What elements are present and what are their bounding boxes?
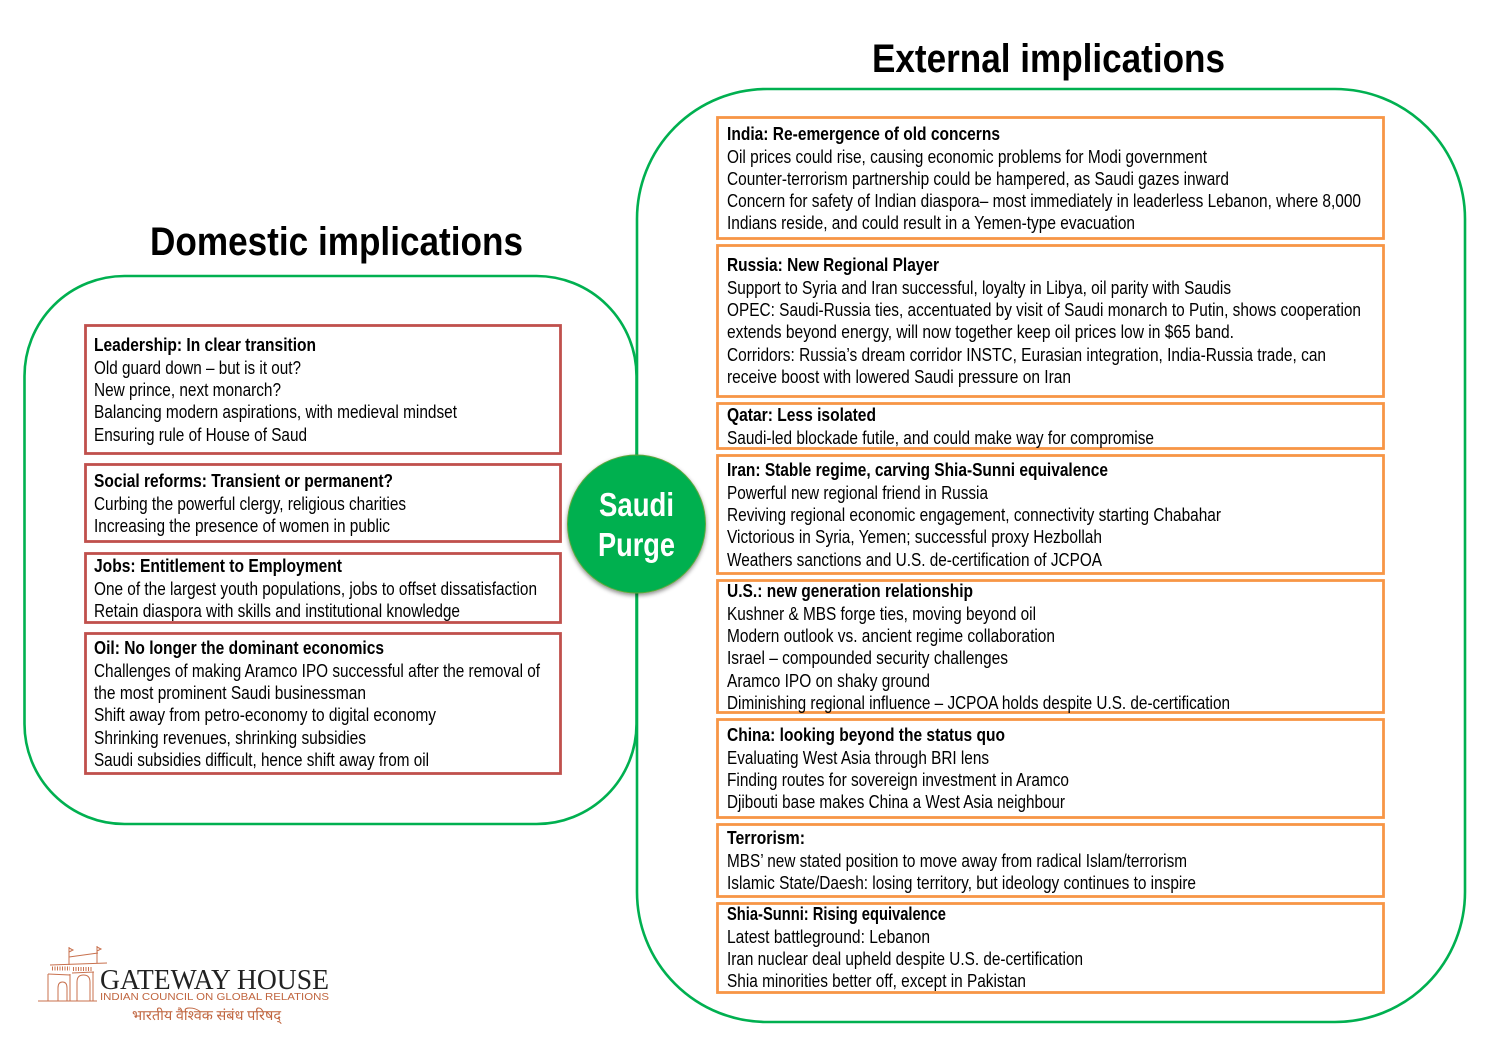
center circle: Saudi Purge — [568, 455, 706, 593]
box: oil: Shrinking revenues, shrinking subsidies — [94, 728, 366, 748]
box: jobs: Jobs: Entitlement to Employment — [94, 556, 342, 576]
box: us: Aramco IPO on shaky ground — [727, 671, 930, 691]
box: jobs: One of the largest youth populations, jobs to offset dissatisfaction — [94, 579, 537, 599]
box: russia: Support to Syria and Iran successful, loyalty in Libya, oil parity with Saudis — [727, 278, 1231, 298]
box: shia-sunni — [718, 904, 1384, 992]
box: india: Concern for safety of Indian diaspora– most immediately in leaderless Lebanon, where 8,000 — [727, 191, 1361, 211]
box: iran: Victorious in Syria, Yemen; successful proxy Hezbollah — [727, 527, 1102, 547]
box: china: Finding routes for sovereign investment in Aramco — [727, 770, 1069, 790]
box: us — [718, 580, 1384, 713]
box: oil: Shift away from petro-economy to digital economy — [94, 705, 436, 725]
box: qatar — [718, 404, 1384, 448]
box: shia-sunni: Latest battleground: Lebanon — [727, 927, 930, 947]
box: jobs — [86, 554, 560, 622]
box: russia — [718, 246, 1384, 396]
box: india: Oil prices could rise, causing economic problems for Modi government — [727, 147, 1207, 167]
box: leadership: Old guard down – but is it out? — [94, 358, 301, 378]
panel: external container — [637, 89, 1465, 1022]
box: iran: Reviving regional economic engagement, connectivity starting Chabahar — [727, 505, 1221, 525]
center circle: Saudi Purge: Saudi — [599, 486, 674, 523]
box: india: Counter-terrorism partnership could be hampered, as Saudi gazes inward — [727, 169, 1229, 189]
logo hindi line: भारतीय वैश्विक संबंध परिषद् — [132, 1007, 282, 1025]
box: jobs: Retain diaspora with skills and institutional knowledge — [94, 601, 460, 621]
box: social reforms: Social reforms: Transient or permanent? — [94, 471, 393, 491]
box: oil: Saudi subsidies difficult, hence shift away from oil — [94, 750, 429, 770]
box: leadership: Leadership: In clear transition — [94, 335, 316, 355]
logo tagline: INDIAN COUNCIL ON GLOBAL RELATIONS — [100, 991, 329, 1003]
box: leadership — [86, 326, 560, 454]
box: social reforms: Increasing the presence of women in public — [94, 516, 390, 536]
box: leadership: Balancing modern aspirations, with medieval mindset — [94, 402, 457, 422]
box: china: Djibouti base makes China a West Asia neighbour — [727, 792, 1065, 812]
box: oil: Challenges of making Aramco IPO successful after the removal of — [94, 661, 541, 681]
box: shia-sunni: Shia-Sunni: Rising equivalence — [727, 904, 946, 924]
box: oil: Oil: No longer the dominant economics — [94, 638, 384, 658]
box: oil: the most prominent Saudi businessman — [94, 683, 366, 703]
box: terrorism — [718, 824, 1384, 896]
box: leadership: Ensuring rule of House of Saud — [94, 425, 307, 445]
box: shia-sunni: Iran nuclear deal upheld despite U.S. de-certification — [727, 949, 1083, 969]
icon: gateway arch drawing — [38, 946, 107, 1001]
box: iran: Powerful new regional friend in Russia — [727, 483, 989, 503]
heading: external implications: External implications — [872, 37, 1225, 81]
box: terrorism: MBS’ new stated position to move away from radical Islam/terrorism — [727, 851, 1187, 871]
box: china — [718, 720, 1384, 818]
box: russia: extends beyond energy, will now together keep oil prices low in $65 band. — [727, 322, 1234, 342]
box: social reforms: Curbing the powerful clergy, religious charities — [94, 494, 406, 514]
box: iran: Iran: Stable regime, carving Shia-Sunni equivalence — [727, 460, 1108, 480]
box: russia: receive boost with lowered Saudi pressure on Iran — [727, 367, 1071, 387]
box: us: Israel – compounded security challenges — [727, 648, 1008, 668]
box: shia-sunni: Shia minorities better off, except in Pakistan — [727, 971, 1026, 991]
box: social reforms — [86, 464, 560, 542]
box: china: Evaluating West Asia through BRI lens — [727, 748, 989, 768]
box: terrorism: Islamic State/Daesh: losing territory, but ideology continues to inspire — [727, 873, 1196, 893]
box: india — [718, 118, 1384, 238]
box: us: Kushner & MBS forge ties, moving beyond oil — [727, 604, 1036, 624]
box: russia: Corridors: Russia’s dream corridor INSTC, Eurasian integration, India-Russia trade, can — [727, 345, 1326, 365]
logo wordmark: GATEWAY HOUSE — [100, 964, 329, 996]
box: india: Indians reside, and could result in a Yemen-type evacuation — [727, 213, 1135, 233]
box: china: China: looking beyond the status quo — [727, 725, 1005, 745]
box: iran — [718, 456, 1384, 574]
box: qatar: Qatar: Less isolated — [727, 405, 876, 425]
logo: Gateway House — [38, 946, 329, 1025]
box: terrorism: Terrorism: — [727, 828, 805, 848]
box: oil — [86, 634, 560, 774]
box: us: Diminishing regional influence – JCPOA holds despite U.S. de-certification — [727, 693, 1230, 713]
box: russia: Russia: New Regional Player — [727, 255, 939, 275]
box: iran: Weathers sanctions and U.S. de-certification of JCPOA — [727, 550, 1102, 570]
box: us: Modern outlook vs. ancient regime collaboration — [727, 626, 1055, 646]
box: qatar: Saudi-led blockade futile, and could make way for compromise — [727, 428, 1154, 448]
box: russia: OPEC: Saudi-Russia ties, accentuated by visit of Saudi monarch to Putin, shows cooperation — [727, 300, 1361, 320]
box: us: U.S.: new generation relationship — [727, 581, 973, 601]
box: india: India: Re-emergence of old concerns — [727, 124, 1000, 144]
panel: domestic container — [24, 276, 636, 824]
box: leadership: New prince, next monarch? — [94, 380, 281, 400]
center circle: Saudi Purge: Purge — [598, 526, 675, 563]
heading: domestic implications: Domestic implications — [150, 220, 523, 264]
